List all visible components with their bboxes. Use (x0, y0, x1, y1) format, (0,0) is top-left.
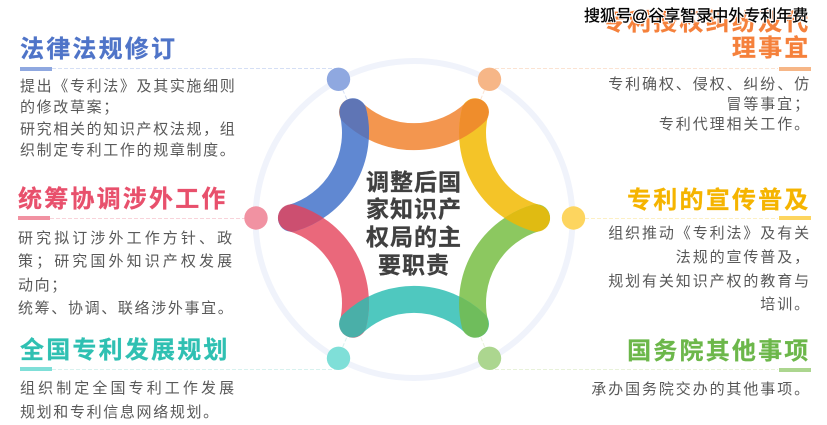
panel: national planning: 组织制定全国专利工作发展 (20, 380, 237, 397)
panel: patent confirmation and disputes: 专利确权、侵权、纠纷、仿 (608, 76, 811, 93)
panel: national planning: 全国专利发展规划 (20, 336, 230, 364)
panel: foreign affairs: 研究拟订涉外工作方针、政 (18, 230, 235, 247)
panel: other State Council matters: 承办国务院交办的其他事项。 (591, 381, 811, 398)
centre title: 权局的主 (366, 224, 462, 250)
panel: national planning (20, 336, 237, 421)
panel: patent confirmation and disputes: 理事宜 (732, 34, 810, 62)
outer ring (256, 61, 572, 378)
panel: patent confirmation and disputes (601, 8, 811, 133)
panel: patent publicity: 组织推动《专利法》及有关 (608, 225, 811, 242)
panel: other State Council matters (591, 338, 811, 398)
six coloured arcs (291, 112, 537, 324)
panel: legal revision: 研究相关的知识产权法规，组 (20, 121, 236, 138)
panel: patent publicity: 专利的宣传普及 (627, 186, 810, 214)
panel: patent confirmation and disputes: 专利授权纠纷及代 (601, 8, 810, 36)
panel: patent confirmation and disputes: 专利代理相关工作。 (659, 116, 811, 133)
panel: patent publicity (608, 186, 811, 313)
centre title (366, 169, 462, 278)
panel: legal revision: 织制定专利工作的规章制度。 (20, 142, 236, 159)
panel: national planning: 规划和专利信息网络规划。 (20, 404, 220, 421)
panel: foreign affairs: 动向； (18, 277, 68, 294)
panel: foreign affairs: 策；研究国外知识产权发展 (18, 253, 235, 270)
centre title: 要职责 (378, 252, 450, 278)
panel: patent publicity: 培训。 (760, 296, 811, 313)
panel: foreign affairs (18, 186, 235, 317)
centre title: 家知识产 (366, 196, 462, 222)
panel: patent publicity: 规划有关知识产权的教育与 (608, 273, 811, 290)
node dots (244, 68, 585, 370)
panel: foreign affairs: 统筹协调涉外工作 (18, 186, 228, 212)
panel: legal revision: 提出《专利法》及其实施细则 (20, 78, 236, 95)
panel: foreign affairs: 统筹、协调、联络涉外事宜。 (18, 300, 234, 317)
panel: patent confirmation and disputes: 冒等事宜； (726, 96, 811, 113)
panel: legal revision (20, 36, 236, 159)
panel: patent publicity: 法规的宣传普及， (676, 249, 811, 266)
watermark: 搜狐号@谷享智录中外专利年费 (584, 8, 808, 25)
central hexagram diagram (50, 58, 778, 381)
panel: legal revision: 法律法规修订 (20, 36, 177, 62)
panel: other State Council matters: 国务院其他事项 (627, 338, 810, 364)
centre title: 调整后国 (366, 169, 462, 195)
panel: legal revision: 的修改草案； (20, 99, 120, 116)
